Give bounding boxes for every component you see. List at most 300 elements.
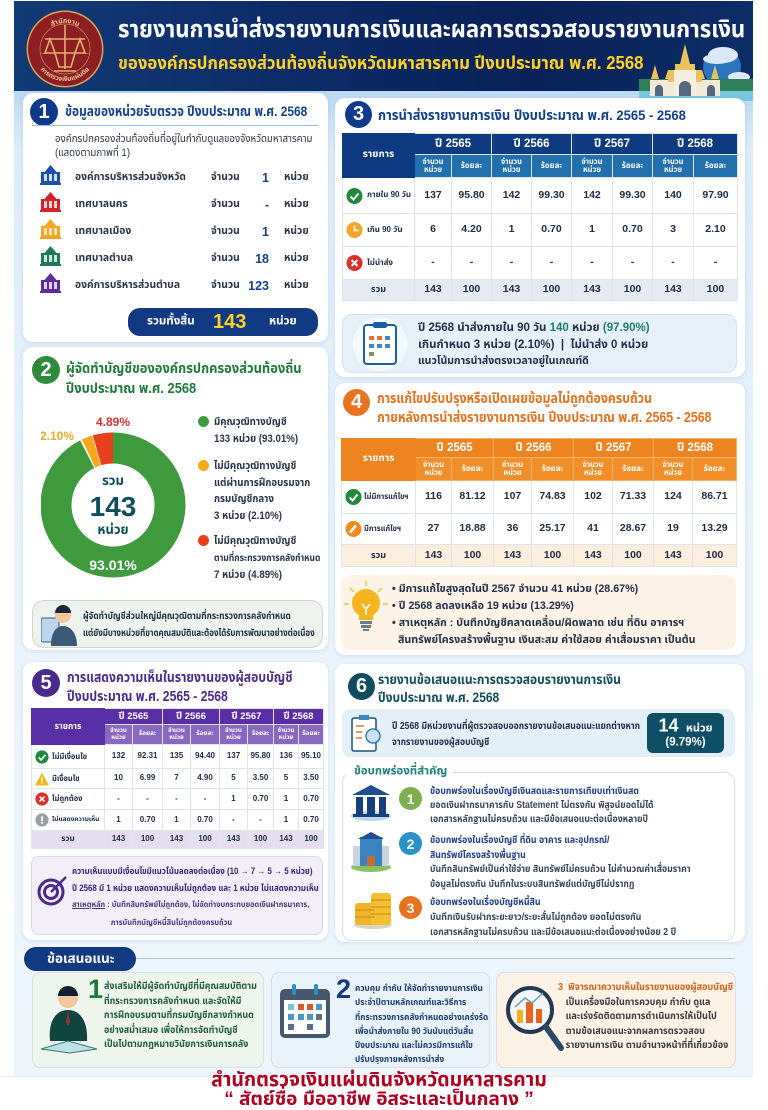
table: submission: - bbox=[510, 256, 513, 268]
badge 5: 5 bbox=[40, 672, 52, 694]
summary bullets: สินทรัพย์โครงสร้างพื้นฐาน เงินสะสม ค่าใช้สอย ค่าเสื่อมราคา เป็นต้น bbox=[398, 634, 696, 646]
legend: trained: แต่ผ่านการฝึกอบรมจาก bbox=[214, 476, 310, 488]
table: submission: 137 bbox=[424, 189, 442, 201]
table: opinions: - bbox=[259, 815, 262, 824]
table: corrections: หน่วย bbox=[664, 468, 682, 477]
table: opinions: 1 bbox=[284, 815, 288, 824]
table: submission: 1 bbox=[509, 223, 514, 235]
table: submission: รวม bbox=[371, 284, 386, 294]
row: provincial: 1 bbox=[262, 171, 269, 185]
table: corrections: มีการแก้ไขฯ bbox=[364, 524, 401, 533]
icon: temple and clouds bbox=[639, 44, 753, 101]
opinions text: ความเห็นแบบมีเงื่อนไขมีแนวโน้มลดลงต่อเนื่อง (10 → 7 → 5 → 5 หน่วย) bbox=[72, 866, 312, 876]
text: ประจำปีตามหลักเกณฑ์และวิธีการ bbox=[355, 997, 466, 1007]
table: corrections: 143 bbox=[664, 549, 682, 561]
table: opinions: ไม่มีเงื่อนไข bbox=[52, 752, 87, 761]
legend: unqualified: ตามที่กระทรวงการคลังกำหนด bbox=[214, 552, 320, 564]
row: provincial: องค์การบริหารส่วนจังหวัด bbox=[75, 172, 186, 183]
table: opinions: 0.70 bbox=[140, 815, 155, 824]
table: opinions: 100 bbox=[304, 834, 318, 843]
table: submission: ปี 2566 bbox=[513, 138, 550, 150]
text 1: เอกสารหลักฐานไม่ครบถ้วน และมีข้อเสนอแนะต่อเนื่องหลายปี bbox=[430, 814, 648, 825]
row: subdistrict administration: จำนวน bbox=[211, 280, 240, 291]
row: subdistrict administration bbox=[40, 273, 309, 293]
number 3: 3 bbox=[407, 900, 414, 916]
text 2 bbox=[430, 832, 691, 890]
callout: corrections summary bbox=[341, 575, 736, 650]
count box bbox=[647, 713, 724, 753]
callout text bbox=[83, 608, 315, 638]
table: opinions: 3.50 bbox=[303, 773, 319, 782]
row: town: จำนวน bbox=[211, 226, 240, 237]
table: opinions: ปี 2565 bbox=[119, 711, 148, 722]
icon: audit office seal bbox=[26, 10, 104, 88]
text 2: ข้อบกพร่องในเรื่องบัญชี ที่ดิน อาคาร และอุปกรณ์/ bbox=[430, 835, 609, 846]
summary text bbox=[418, 321, 650, 367]
table: opinions: ไม่แสดงความเห็น bbox=[52, 816, 99, 823]
row: city: - bbox=[265, 198, 269, 212]
deficiency 3 bbox=[354, 893, 676, 938]
text 1: ข้อบกพร่องในเรื่องบัญชีเงินสดและรายการเทียบเท่าเงินสด bbox=[430, 786, 639, 797]
table: submission: 143 bbox=[664, 283, 682, 295]
heading 4: การแก้ไขปรับปรุงหรือเปิดเผยข้อมูลไม่ถูกต้องครบถ้วน bbox=[377, 391, 652, 407]
text: ส่งเสริมให้มีผู้จัดทำบัญชีที่มีคุณสมบัติตาม bbox=[104, 981, 257, 992]
heading 6: ปีงบประมาณ พ.ศ. 2568 bbox=[378, 690, 499, 705]
table: opinions: - bbox=[175, 794, 178, 803]
number 3 bbox=[399, 896, 422, 919]
summary bullets bbox=[392, 583, 696, 646]
table: submission: 142 bbox=[583, 189, 601, 201]
text: รายงานการเงิน ตามอำนาจหน้าที่ที่เกี่ยวข้อง bbox=[566, 1040, 728, 1051]
table: corrections: ไม่มีการแก้ไขฯ bbox=[364, 492, 408, 501]
table: opinions: - bbox=[232, 815, 235, 824]
table: opinions: 1 bbox=[284, 794, 288, 803]
text 1 bbox=[430, 784, 654, 825]
table: opinions: 143 bbox=[227, 834, 240, 843]
recommendation card 2 bbox=[271, 972, 490, 1068]
text: เป็นเครื่องมือในการควบคุม กำกับ ดูแล bbox=[566, 996, 710, 1008]
table: opinions: 143 bbox=[170, 834, 183, 843]
table: corrections: 18.88 bbox=[459, 522, 486, 534]
table: submission: 100 bbox=[707, 283, 724, 295]
table: submission: - bbox=[631, 256, 634, 268]
heading 4 bbox=[377, 390, 711, 426]
text: และเร่งรัดติดตามการดำเนินการให้เป็นไป bbox=[566, 1011, 717, 1022]
table: opinions: 100 bbox=[198, 834, 212, 843]
legend: qualified: 133 หน่วย (93.01%) bbox=[214, 432, 298, 444]
table: corrections: 100 bbox=[706, 549, 723, 561]
table: corrections: 100 bbox=[544, 549, 561, 561]
opinions text bbox=[72, 864, 319, 927]
icon: audit office seal: สำนักงาน bbox=[50, 18, 80, 26]
table: opinions: 0.70 bbox=[303, 794, 319, 803]
donut chart: หน่วย bbox=[97, 522, 129, 537]
table: corrections: ร้อยละ bbox=[704, 464, 725, 473]
table: submission: ร้อยละ bbox=[705, 161, 726, 170]
table: opinions: 3.50 bbox=[253, 773, 268, 782]
row: subdistrict municipality: 18 bbox=[255, 252, 269, 266]
row: town: 1 bbox=[262, 225, 269, 239]
text 3: บันทึกเงินรับฝากระยะยาว/ระยะสั้นไม่ถูกต้อง ยอดไม่ตรงกัน bbox=[430, 912, 641, 923]
big number 2: 2 bbox=[336, 974, 351, 1004]
table: submission: เกิน 90 วัน bbox=[367, 225, 403, 234]
table: opinions: - bbox=[204, 794, 206, 803]
number 1: 1 bbox=[407, 790, 414, 806]
donut chart: 93.01% bbox=[89, 557, 137, 573]
text bbox=[558, 981, 733, 1054]
table: submission: หน่วย bbox=[502, 165, 521, 174]
badge 4 bbox=[343, 389, 370, 416]
icon: bank bbox=[351, 785, 391, 821]
icon: accountant bbox=[41, 605, 77, 646]
icon: person reading bbox=[41, 985, 97, 1055]
row: subdistrict municipality: หน่วย bbox=[284, 253, 309, 264]
table: submission: ภายใน 90 วัน bbox=[367, 190, 411, 199]
table: submission: จำนวน bbox=[582, 157, 602, 166]
table: corrections: 19 bbox=[667, 522, 679, 534]
table: corrections: 27 bbox=[428, 522, 439, 534]
opinions text: สาเหตุหลัก : บันทึกสินทรัพย์ไม่ถูกต้อง, ไม่จัดทำงบกระทบยอดเงินฝากธนาคาร, bbox=[72, 900, 309, 909]
donut chart: รวม bbox=[102, 473, 124, 488]
heading 2: ปีงบประมาณ พ.ศ. 2568 bbox=[66, 381, 196, 397]
badge 2: 2 bbox=[40, 358, 52, 380]
row: subdistrict municipality: จำนวน bbox=[211, 253, 240, 264]
legend: trained bbox=[198, 460, 310, 522]
table: submission: ปี 2567 bbox=[594, 138, 630, 150]
recommendation card 1 bbox=[32, 972, 264, 1068]
heading 6: รายงานข้อเสนอแนะการตรวจสอบรายงานการเงิน bbox=[378, 672, 621, 687]
table: corrections: 107 bbox=[504, 490, 521, 502]
table: opinions: ปี 2568 bbox=[284, 711, 313, 722]
deficiencies heading: ข้อบกพร่องที่สำคัญ bbox=[354, 765, 447, 777]
row: town: หน่วย bbox=[284, 226, 309, 237]
table: opinions: 1 bbox=[116, 815, 121, 824]
row: city: จำนวน bbox=[211, 199, 240, 210]
donut chart: 143 bbox=[90, 491, 136, 522]
big number 1: 1 bbox=[88, 974, 103, 1004]
donut chart: 4.89% bbox=[96, 415, 130, 429]
table: opinions: หน่วย bbox=[169, 734, 184, 740]
table: submission: ร้อยละ bbox=[622, 161, 643, 170]
intro text: (แสดงตามภาพที่ 1) bbox=[55, 147, 130, 159]
panel 5: auditor opinions bbox=[23, 662, 328, 940]
text 3 bbox=[430, 894, 676, 938]
table: opinions: หน่วย bbox=[226, 734, 241, 740]
row: provincial: จำนวน bbox=[211, 172, 240, 183]
badge 2 bbox=[32, 356, 60, 384]
text: ควบคุม กำกับ ให้จัดทำรายงานการเงิน bbox=[355, 983, 483, 993]
table: submission: - bbox=[590, 256, 594, 268]
table: opinions: หน่วย bbox=[279, 734, 293, 740]
table: opinions: 5 bbox=[231, 773, 236, 782]
count box: (9.79%) bbox=[665, 736, 706, 748]
badge 3: 3 bbox=[353, 103, 364, 125]
row: subdistrict administration: หน่วย bbox=[284, 280, 309, 291]
heading 3: การนำส่งรายงานการเงิน ปีงบประมาณ พ.ศ. 2565 - 2568 bbox=[378, 107, 686, 123]
table: opinions: 0.70 bbox=[303, 815, 319, 824]
table: opinions: 143 bbox=[279, 834, 293, 843]
table: opinions: 137 bbox=[227, 751, 240, 760]
text: 3 พิจารณาความเห็นในรายงานของผู้สอบบัญชี bbox=[558, 982, 733, 993]
deficiency 1 bbox=[351, 784, 654, 825]
footer band bbox=[0, 1076, 753, 1109]
text: ที่กระทรวงการคลังกำหนดอย่างเคร่งรัด bbox=[355, 1012, 488, 1022]
intro text: องค์กรปกครองส่วนท้องถิ่นที่อยู่ในกำกับดูแลของจังหวัดมหาสารคาม bbox=[55, 133, 312, 145]
table: opinions: 10 bbox=[114, 773, 123, 782]
table: opinions: ปี 2566 bbox=[176, 711, 206, 722]
heading 5 bbox=[66, 670, 293, 705]
table: opinions: - bbox=[117, 794, 120, 803]
text: ตามข้อเสนอแนะจากผลการตรวจสอบ bbox=[566, 1026, 705, 1036]
table: submission: ปี 2565 bbox=[435, 138, 471, 150]
text: การฝึกอบรมตามที่กรมบัญชีกลางกำหนด bbox=[104, 1010, 254, 1021]
table: corrections: 71.33 bbox=[620, 490, 646, 502]
icon: light bulb bbox=[344, 581, 388, 631]
table: opinions: ร้อยละ bbox=[139, 730, 156, 737]
opinions text: ปี 2568 มี 1 หน่วย แสดงความเห็นไม่ถูกต้อง และ 1 หน่วย ไม่แสดงความเห็น bbox=[72, 882, 319, 892]
legend: unqualified: 7 หน่วย (4.89%) bbox=[214, 569, 282, 581]
recommendations pill: ข้อเสนอแนะ bbox=[47, 951, 115, 966]
table: submission: - bbox=[470, 256, 473, 268]
summary text: แนวโน้มการนำส่งตรงเวลาอยู่ในเกณฑ์ดี bbox=[418, 355, 589, 367]
table: opinions: ปี 2567 bbox=[232, 711, 261, 722]
badge 5 bbox=[32, 669, 60, 697]
table: submission: 142 bbox=[503, 189, 520, 201]
badge 1 bbox=[30, 98, 58, 126]
row: provincial: หน่วย bbox=[284, 172, 309, 183]
legend: trained: 3 หน่วย (2.10%) bbox=[214, 510, 282, 522]
table: opinions: 100 bbox=[141, 834, 154, 843]
text 3: เอกสารหลักฐานไม่ครบถ้วน และมีข้อเสนอแนะต่อเนื่องอย่างน้อย 2 ปี bbox=[430, 927, 676, 938]
table: corrections: 143 bbox=[584, 549, 602, 561]
callout: opinions summary bbox=[31, 856, 323, 935]
total pill bbox=[128, 308, 318, 336]
panel 4: corrections bbox=[335, 383, 745, 655]
table: submission: 140 bbox=[664, 189, 682, 201]
section: recommendations bar bbox=[135, 958, 735, 959]
table: corrections: 116 bbox=[425, 490, 442, 502]
table: opinions: จำนวน bbox=[225, 728, 242, 734]
table: opinions: 135 bbox=[170, 751, 183, 760]
table: submission: 143 bbox=[424, 283, 442, 295]
table: corrections: 28.67 bbox=[620, 522, 646, 534]
deficiency 2 bbox=[351, 832, 691, 890]
row: subdistrict administration: องค์การบริหารส่วนตำบล bbox=[75, 280, 180, 291]
text bbox=[104, 980, 257, 1052]
table: opinions: ร้อยละ bbox=[302, 730, 320, 737]
panel 6: management letter bbox=[335, 664, 745, 942]
table: corrections: จำนวน bbox=[582, 460, 604, 469]
table: opinions: จำนวน bbox=[278, 728, 294, 734]
footer text bbox=[0, 1071, 758, 1109]
table: submission: - bbox=[671, 256, 675, 268]
table: corrections: หน่วย bbox=[424, 468, 443, 477]
table: corrections: ปี 2566 bbox=[515, 442, 552, 454]
total pill: หน่วย bbox=[269, 315, 297, 327]
footer text: สำนักตรวจเงินแผ่นดินจังหวัดมหาสารคาม bbox=[211, 1069, 547, 1091]
table: submission: ไม่นำส่ง bbox=[367, 258, 393, 267]
summary text: จากรายงานของผู้สอบบัญชี bbox=[392, 737, 489, 748]
table: corrections: 143 bbox=[425, 549, 442, 561]
footer text: “ สัตย์ซื่อ มืออาชีพ อิสระและเป็นกลาง ” bbox=[224, 1088, 534, 1110]
table: opinions: 136 bbox=[279, 751, 293, 760]
table: submission: 2.10 bbox=[705, 223, 726, 235]
heading 1: ข้อมูลของหน่วยรับตรวจ ปีงบประมาณ พ.ศ. 2568 bbox=[65, 103, 307, 119]
legend bbox=[198, 416, 320, 581]
summary text: ปี 2568 มีหน่วยงานที่ผู้ตรวจสอบออกรายงานข้อเสนอแนะแยกต่างหาก bbox=[392, 721, 640, 732]
table: opinions: ไม่ถูกต้อง bbox=[52, 794, 82, 803]
row: subdistrict municipality: เทศบาลตำบล bbox=[75, 253, 133, 264]
table: opinions: รวม bbox=[61, 834, 75, 843]
legend: unqualified: ไม่มีคุณวุฒิทางบัญชี bbox=[214, 535, 296, 547]
summary bullets: • มีการแก้ไขสูงสุดในปี 2567 จำนวน 41 หน่วย (28.67%) bbox=[392, 583, 638, 595]
table: submission: หน่วย bbox=[424, 165, 442, 174]
summary bar bbox=[342, 709, 735, 757]
table: submission: จำนวน bbox=[501, 157, 522, 166]
table: corrections: หน่วย bbox=[503, 468, 522, 477]
table: corrections: 74.83 bbox=[539, 490, 566, 502]
text 2: ข้อมูลไม่ตรงกัน บันทึกในระบบสินทรัพย์แต่บัญชีไม่ปรากฏ bbox=[430, 878, 634, 890]
heading 2: ผู้จัดทำบัญชีขององค์กรปกครองส่วนท้องถิ่น bbox=[66, 361, 302, 377]
table: submission: 95.80 bbox=[458, 189, 485, 201]
table: opinions: จำนวน bbox=[168, 728, 185, 734]
table: opinions: 0.70 bbox=[197, 815, 213, 824]
text: ปีงบประมาณ และไม่ควรมีการแก้ไข bbox=[355, 1040, 473, 1050]
table: submission: 100 bbox=[624, 283, 641, 295]
badge 6 bbox=[348, 673, 375, 700]
icon: clipboard bbox=[353, 317, 407, 371]
heading 5: ปีงบประมาณ พ.ศ. 2565 - 2568 bbox=[67, 689, 228, 705]
count box: 14 หน่วย bbox=[658, 716, 712, 736]
table: opinions: 100 bbox=[254, 834, 267, 843]
row: subdistrict municipality bbox=[40, 246, 309, 266]
row: subdistrict administration: 123 bbox=[248, 279, 269, 293]
callout text: แต่ยังมีบางหน่วยที่ขาดคุณสมบัติและต้องได้รับการพัฒนาอย่างต่อเนื่อง bbox=[83, 627, 315, 638]
text 1: ยอดเงินฝากธนาคารกับ Statement ไม่ตรงกัน พิสูจน์ยอดไม่ได้ bbox=[430, 800, 654, 811]
deficiencies box bbox=[342, 772, 735, 941]
badge 3 bbox=[345, 101, 372, 128]
legend: trained: ไม่มีคุณวุฒิทางบัญชี bbox=[214, 460, 296, 472]
table: corrections bbox=[341, 438, 737, 567]
badge 4: 4 bbox=[351, 391, 362, 413]
table: submission: - bbox=[431, 256, 435, 268]
row: town: เทศบาลเมือง bbox=[75, 226, 131, 237]
table: opinions: หน่วย bbox=[111, 734, 126, 740]
table: submission: - bbox=[550, 256, 553, 268]
summary text bbox=[392, 718, 640, 748]
table: opinions: มีเงื่อนไข bbox=[52, 774, 80, 783]
text: ปรับปรุงภายหลังการนำส่ง bbox=[355, 1054, 444, 1064]
text: ที่กระทรวงการคลังกำหนด และจัดให้มี bbox=[104, 996, 241, 1006]
table: corrections: 25.17 bbox=[539, 522, 566, 534]
text: เพื่อนำส่งภายใน 90 วันนับแต่วันสิ้น bbox=[355, 1026, 473, 1036]
table: submission: หน่วย bbox=[583, 165, 601, 174]
unit rows bbox=[40, 165, 309, 293]
text 2: บันทึกสินทรัพย์เป็นค่าใช้จ่าย สินทรัพย์ไม่ครบถ้วน ไม่คำนวณค่าเสื่อมราคา bbox=[430, 864, 691, 875]
table: corrections: 13.29 bbox=[701, 522, 728, 534]
table: corrections: 124 bbox=[664, 490, 682, 502]
table: corrections: จำนวน bbox=[423, 460, 444, 469]
icon: target bbox=[38, 876, 67, 906]
table: opinions: ร้อยละ bbox=[196, 730, 214, 737]
table: corrections: 41 bbox=[587, 522, 599, 534]
table: opinions: ร้อยละ bbox=[252, 730, 269, 737]
table: submission: 143 bbox=[503, 283, 520, 295]
table: submission: 97.90 bbox=[702, 189, 729, 201]
legend: qualified: มีคุณวุฒิทางบัญชี bbox=[214, 416, 287, 428]
legend: qualified bbox=[198, 416, 298, 444]
heading 4: ภายหลังการนำส่งรายงานการเงิน ปีงบประมาณ พ.ศ. 2565 - 2568 bbox=[377, 410, 711, 426]
recommendations pill bbox=[24, 947, 136, 971]
table: submission: 143 bbox=[583, 283, 601, 295]
table: submission: 6 bbox=[430, 223, 436, 235]
table: submission: จำนวน bbox=[662, 157, 684, 166]
table: opinions: 94.40 bbox=[195, 751, 215, 760]
table: corrections: 100 bbox=[624, 549, 642, 561]
table: corrections: หน่วย bbox=[584, 468, 602, 477]
table: corrections: 143 bbox=[504, 549, 521, 561]
legend: unqualified bbox=[198, 535, 320, 581]
row: town bbox=[40, 219, 309, 239]
table: opinions: 4.90 bbox=[197, 773, 213, 782]
table: submission: 3 bbox=[670, 223, 676, 235]
icon: building bbox=[351, 832, 391, 872]
table: submission: 4.20 bbox=[461, 223, 482, 235]
table: corrections: 100 bbox=[464, 549, 481, 561]
table: opinions: จำนวน bbox=[110, 728, 127, 734]
total pill: รวมทั้งสิ้น bbox=[147, 315, 195, 327]
summary bullets: • ปี 2568 ลดลงเหลือ 19 หน่วย (13.29%) bbox=[392, 600, 574, 612]
intro text bbox=[55, 130, 312, 159]
badge 6: 6 bbox=[356, 675, 367, 697]
total pill: 143 bbox=[213, 311, 246, 333]
table: opinions: 0.70 bbox=[253, 794, 268, 803]
table: corrections: 36 bbox=[507, 522, 518, 534]
table: corrections: ปี 2567 bbox=[595, 442, 632, 454]
table: opinions: 92.31 bbox=[137, 751, 158, 760]
text bbox=[355, 981, 488, 1067]
heading 5: การแสดงความเห็นในรายงานของผู้สอบบัญชี bbox=[67, 670, 293, 686]
icon: coins bbox=[354, 893, 392, 929]
row: city: เทศบาลนคร bbox=[75, 199, 128, 210]
row: provincial bbox=[40, 165, 309, 185]
table: opinions: 132 bbox=[112, 751, 125, 760]
summary text: เกินกำหนด 3 หน่วย (2.10%) | ไม่นำส่ง 0 หน่วย bbox=[418, 338, 648, 350]
table: submission: 100 bbox=[463, 283, 480, 295]
table: opinions: - bbox=[146, 794, 149, 803]
table: corrections: ร้อยละ bbox=[542, 464, 563, 473]
table: opinions: 1 bbox=[174, 815, 179, 824]
table: corrections: ร้อยละ bbox=[462, 464, 483, 473]
table: submission: 1 bbox=[589, 223, 595, 235]
table: opinions: 95.10 bbox=[301, 751, 321, 760]
table: submission: 0.70 bbox=[622, 223, 643, 235]
table: submission: ปี 2568 bbox=[677, 138, 713, 150]
text 2: สินทรัพย์โครงสร้างพื้นฐาน bbox=[430, 850, 526, 860]
table: opinions: 1 bbox=[231, 794, 236, 803]
row: city bbox=[40, 192, 309, 212]
title: รายงานการนำส่งรายงานการเงินและผลการตรวจสอบรายงานการเงิน bbox=[118, 16, 745, 43]
table: submission: หน่วย bbox=[664, 165, 682, 174]
number 1 bbox=[399, 787, 422, 810]
table: corrections: 81.12 bbox=[459, 490, 486, 502]
header banner bbox=[14, 1, 753, 91]
icon: report with magnifier bbox=[351, 715, 381, 752]
number 2: 2 bbox=[407, 836, 414, 852]
table: opinions: 7 bbox=[174, 773, 179, 782]
table: submission: จำนวน bbox=[422, 157, 444, 166]
table: opinions bbox=[31, 708, 324, 849]
